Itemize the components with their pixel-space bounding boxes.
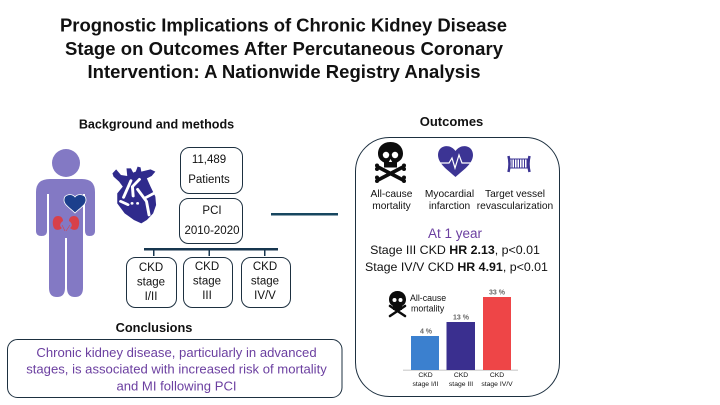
box: CKD stage I/II: CKD — [139, 262, 163, 274]
box: PCI period: PCI — [202, 205, 222, 217]
bar chart: all-cause mortality: CKD — [490, 372, 504, 379]
panel: conclusions: Chronic kidney disease, particularly in advanced — [36, 345, 317, 360]
icon: heart with pulse — [438, 146, 473, 177]
box: patients — [180, 148, 242, 194]
box: CKD stage IV/V: stage — [251, 276, 279, 288]
heading: conclusions: Conclusions — [116, 320, 192, 335]
box: CKD stage III: CKD — [195, 261, 219, 273]
connector: bracket to CKD stages — [144, 248, 278, 256]
bar chart: all-cause mortality: stage III — [449, 381, 473, 388]
heading: at 1 year: At 1 year — [428, 226, 483, 241]
outcome labels: Myocardial — [425, 189, 474, 200]
arrow line: methods to outcomes — [271, 213, 338, 216]
box: patients: 11,489 — [192, 154, 226, 166]
box: CKD stage IV/V — [242, 258, 290, 308]
bar chart: all-cause mortality: stage IV/V — [481, 381, 513, 388]
outcome labels — [371, 189, 553, 212]
panel: conclusions: and MI following PCI — [116, 378, 237, 394]
bar chart: all-cause mortality: 4 % — [420, 328, 433, 336]
icon: person with heart and kidneys — [36, 149, 95, 297]
icon: anatomical heart — [112, 167, 156, 223]
icon: skull and crossbones — [375, 142, 406, 183]
bar chart: all-cause mortality: CKD — [454, 372, 468, 379]
outcome labels: revascularization — [477, 201, 553, 212]
panel: conclusions — [8, 340, 342, 398]
hazard ratios: Stage IV/V CKD HR 4.91, p<0.01 — [365, 260, 548, 274]
title: Stage on Outcomes After Percutaneous Coronary — [65, 38, 504, 59]
heading: background and methods: Background and methods — [79, 118, 234, 132]
outcome labels: Target vessel — [485, 189, 545, 200]
hazard ratios: Stage III CKD HR 2.13, p<0.01 — [370, 243, 540, 257]
box: CKD stage I/II — [126, 258, 176, 308]
heading: outcomes: Outcomes — [420, 114, 483, 129]
bar chart: all-cause mortality: stage I/II — [412, 381, 439, 388]
box: CKD stage I/II: I/II — [145, 291, 157, 303]
box: CKD stage III: III — [202, 290, 212, 302]
title: Prognostic Implications of Chronic Kidney Disease — [60, 14, 507, 36]
box: CKD stage I/II: stage — [137, 276, 165, 288]
title — [60, 14, 507, 82]
outcome labels: All-cause — [371, 189, 413, 200]
hazard ratios — [365, 243, 548, 274]
box: CKD stage III — [184, 258, 232, 308]
box: CKD stage III: stage — [193, 276, 221, 288]
outcome labels: mortality — [372, 201, 412, 212]
box: patients: Patients — [188, 174, 230, 186]
icon: small skull and crossbones — [389, 291, 406, 316]
bar chart: all-cause mortality: 13 % — [453, 314, 470, 322]
bar chart: all-cause mortality: CKD — [418, 372, 433, 379]
panel: conclusions: stages, is associated with increased risk of mortality — [26, 362, 327, 376]
box: PCI period: 2010-2020 — [184, 225, 240, 237]
icon: stent — [508, 156, 530, 172]
bar chart: all-cause mortality: mortality — [411, 304, 445, 314]
box: CKD stage IV/V: CKD — [253, 261, 277, 273]
box: PCI period — [180, 198, 242, 244]
bar chart: all-cause mortality: 33 % — [489, 290, 506, 296]
title: Intervention: A Nationwide Registry Analysis — [88, 61, 480, 82]
outcome labels: infarction — [429, 201, 470, 212]
box: CKD stage IV/V: IV/V — [254, 290, 276, 302]
panel: outcomes — [356, 138, 560, 396]
bar chart: all-cause mortality: All-cause — [410, 293, 446, 303]
bar chart: all-cause mortality — [389, 290, 518, 388]
